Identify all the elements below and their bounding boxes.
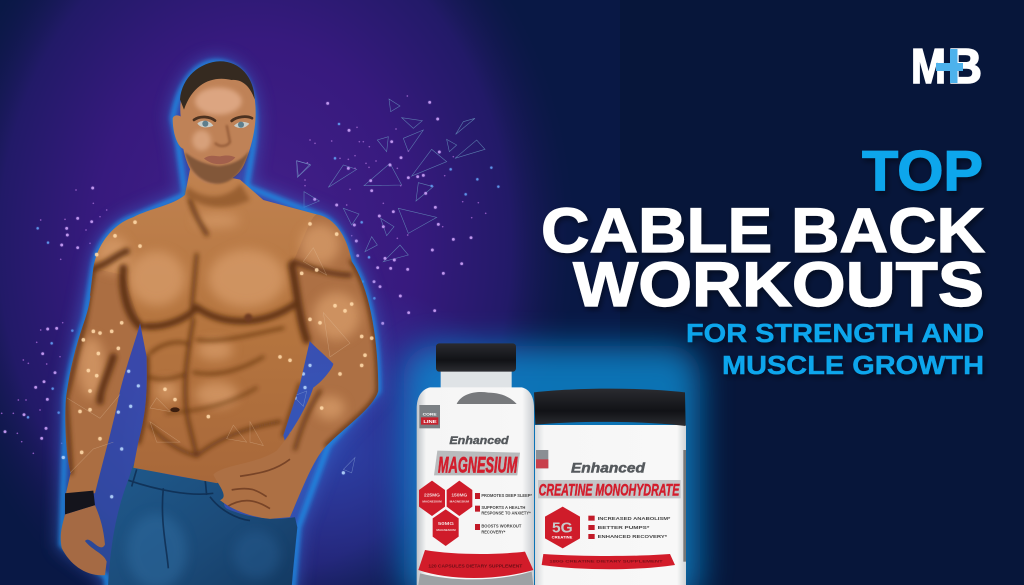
muscle shading	[66, 200, 378, 509]
subheading line one: FOR STRENGTH AND	[686, 318, 984, 348]
jar hexagon	[545, 507, 580, 548]
hair	[180, 61, 255, 110]
bottle brand: Enhanced	[449, 435, 509, 447]
body sparkles	[80, 222, 372, 452]
bottle bullet text	[481, 493, 532, 534]
neck shadow	[185, 184, 250, 207]
product: magnesium bottle: LINE	[423, 419, 437, 424]
capsules in bottle	[457, 392, 517, 404]
eyes	[197, 121, 249, 128]
particle field: left of man	[2, 188, 107, 457]
bottle hexagons	[419, 481, 472, 546]
title block	[541, 139, 985, 380]
left hand	[61, 505, 107, 575]
bottle hexagon labels: MAGNESIUM	[436, 528, 457, 532]
heading: cable back: CABLE BACK	[541, 196, 985, 266]
product glow	[404, 346, 700, 585]
bottle hexagon labels: 150MG	[451, 493, 467, 499]
jar bullet text: INCREASED ANABOLISM*	[598, 516, 671, 521]
product: magnesium bottle	[417, 343, 534, 585]
particle field: right of man	[297, 96, 498, 323]
bottle bullet text: SUPPORTS A HEALTH	[481, 505, 526, 510]
jar brand: Enhanced	[571, 460, 645, 476]
jar bullet text: BETTER PUMPS*	[598, 525, 650, 530]
jar bottom band	[542, 554, 675, 569]
bottle badge	[419, 405, 440, 428]
jar title band	[538, 480, 681, 498]
right arm and hand in pocket	[213, 214, 378, 519]
bottle hexagon labels	[422, 493, 470, 532]
particles in arm gaps	[63, 161, 355, 497]
product: magnesium bottle: CORE	[423, 412, 437, 417]
jar lid	[534, 389, 686, 426]
bottle bullets	[475, 493, 480, 530]
bottle hexagon labels: 225MG	[424, 493, 440, 499]
logo letter M: M	[911, 40, 946, 94]
bottle lid	[436, 343, 516, 372]
wristband	[65, 491, 95, 514]
logo plus	[936, 49, 963, 83]
jar title: CREATINE MONOHYDRATE	[539, 481, 680, 500]
torso and shoulders	[90, 169, 317, 483]
heading: workouts: WORKOUTS	[573, 250, 984, 320]
stubble	[185, 151, 249, 184]
head	[173, 61, 256, 184]
jeans	[107, 464, 297, 585]
jar right label edge	[683, 450, 686, 562]
bottle body	[417, 387, 534, 585]
product: magnesium bottle: 120 CAPSULES DIETARY SUPPLEMENT	[428, 563, 523, 568]
lips	[204, 155, 235, 164]
bottle hexagon labels: MAGNESIUM	[450, 500, 470, 504]
face	[173, 62, 256, 184]
bottle title band	[434, 451, 520, 475]
product: creatine jar: CREATINE	[552, 536, 573, 540]
bottle bullet text: BOOSTS WORKOUT	[481, 523, 521, 528]
bottle hexagon labels: 50MG	[438, 521, 454, 527]
forehead highlight	[195, 88, 242, 115]
heading: top: TOP	[862, 139, 983, 203]
bottle neck	[441, 370, 512, 390]
man figure	[61, 61, 378, 585]
bottle hexagon labels: MAGNESIUM	[422, 500, 443, 504]
bottle bullet text: RESPONSE TO ANXIETY*	[481, 511, 531, 516]
nose	[215, 125, 230, 146]
jar hexagon value: 5G	[552, 521, 573, 537]
body wireframe lines	[67, 248, 350, 473]
jar badge	[536, 450, 548, 468]
glow behind man	[62, 62, 378, 585]
products	[417, 343, 686, 585]
bottle bullet text: PROMOTES DEEP SLEEP*	[481, 493, 532, 498]
jar bullet text	[598, 516, 671, 539]
left arm	[65, 268, 140, 493]
subheading line two: MUSCLE GROWTH	[722, 350, 984, 380]
eyebrows	[194, 117, 252, 121]
cheek highlight	[192, 130, 211, 151]
jar body	[535, 425, 686, 585]
jar bullet text: ENHANCED RECOVERY*	[598, 534, 667, 539]
product: creatine jar	[534, 389, 686, 585]
logo	[911, 40, 982, 94]
product: creatine jar: 180G CREATINE DIETARY SUPPLEMENT	[549, 560, 664, 564]
bottle red band	[418, 550, 533, 578]
bottle title: MAGNESIUM	[438, 452, 518, 477]
jar bullets	[588, 516, 595, 539]
logo letter B: B	[948, 40, 982, 94]
bottle bullet text: RECOVERY*	[481, 529, 505, 534]
